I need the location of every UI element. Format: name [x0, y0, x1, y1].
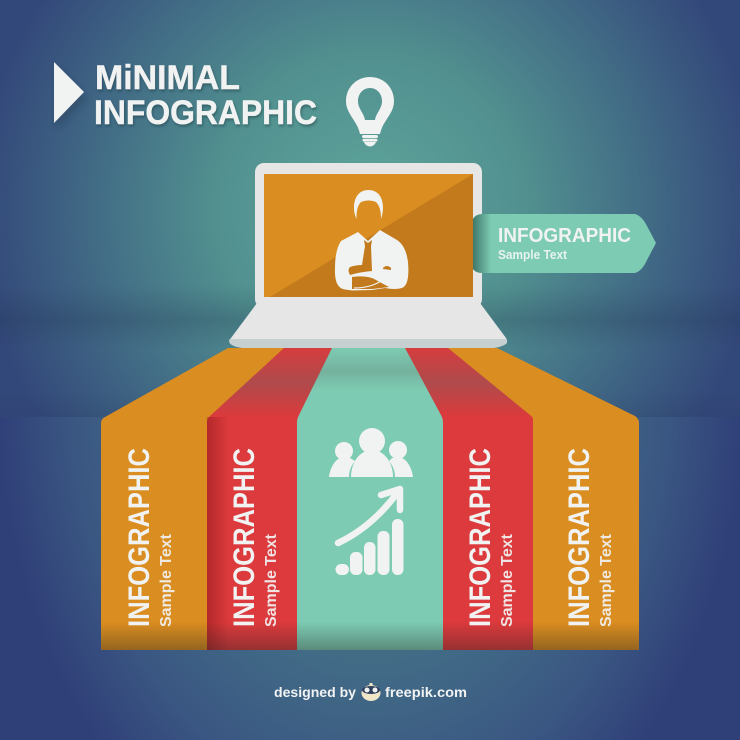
band: right red [400, 348, 533, 650]
icon: group of people [329, 428, 413, 477]
vertical label 1: INFOGRAPHIC [123, 448, 156, 627]
band: center teal [297, 348, 443, 650]
vertical label 2: Sample Text [263, 533, 280, 627]
band: left red [207, 348, 340, 650]
band shading: bottom [101, 622, 639, 650]
vertical label 4 [563, 448, 615, 627]
label tab on laptop: Sample Text [498, 248, 568, 262]
band shading: red fold [207, 348, 533, 417]
icon: growth arrow [338, 489, 400, 543]
title arrow icon [54, 62, 84, 123]
footer credit: designed by [274, 684, 356, 700]
icon: businessman [335, 190, 408, 290]
laptop base [229, 303, 507, 348]
laptop [229, 163, 507, 348]
band: left orange [101, 348, 300, 650]
label tab on laptop: INFOGRAPHIC [498, 225, 631, 247]
footer credit: freepik.com [385, 684, 467, 700]
icon: freepik mascot [362, 683, 380, 701]
icon: light bulb [346, 77, 394, 146]
vertical label 4: Sample Text [598, 533, 615, 627]
vertical label 3 [464, 448, 516, 627]
vertical label 1 [123, 448, 175, 627]
vertical label 4: INFOGRAPHIC [563, 448, 596, 627]
vertical label 2 [228, 448, 280, 627]
vertical label 3: INFOGRAPHIC [464, 448, 497, 627]
band shading: teal fold [311, 348, 427, 390]
ribbon bands [101, 348, 639, 650]
label tab on laptop [473, 214, 656, 273]
footer credit [274, 683, 467, 701]
band shading: red edges [207, 417, 229, 650]
laptop screen [264, 174, 473, 297]
vertical label 1: Sample Text [158, 533, 175, 627]
title: INFOGRAPHIC [94, 94, 317, 132]
vertical label 3: Sample Text [499, 533, 516, 627]
laptop lid [255, 163, 482, 308]
title: MiNIMAL [95, 59, 240, 97]
band: right orange [440, 348, 639, 650]
title [94, 59, 317, 132]
icon: bar chart [336, 519, 404, 575]
vertical label 2: INFOGRAPHIC [228, 448, 261, 627]
